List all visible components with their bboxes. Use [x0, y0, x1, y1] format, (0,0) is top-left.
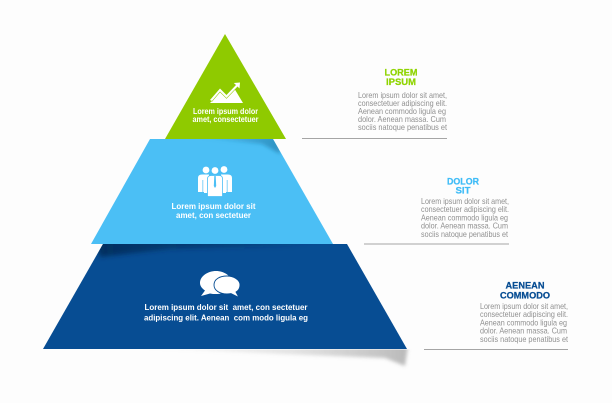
text block: lorem ipsum [358, 68, 448, 132]
text block: dolor sit [421, 176, 509, 239]
body text: lorem ipsum: Aenean commodo ligula eg [358, 106, 446, 116]
drop shadow under pyramid base [208, 350, 410, 367]
heading: aenean commodo [500, 280, 551, 302]
heading: dolor sit: SIT [456, 186, 471, 196]
text block: aenean commodo [480, 280, 569, 344]
body text: dolor sit: Lorem ipsum dolor sit amet, [421, 196, 509, 206]
pyramid tier: top green [165, 34, 286, 139]
icon: speech bubbles [200, 271, 240, 298]
body text: lorem ipsum: dolor. Aenean massa. Cum [358, 114, 446, 124]
body text: aenean commodo: consectetuer adipiscing elit. [480, 309, 568, 319]
light blue tier label [172, 202, 256, 220]
heading: lorem ipsum: LOREM [384, 68, 418, 78]
body text: dolor sit: sociis natoque penatibus et [421, 229, 509, 239]
green tier label: amet, consectetuer [192, 115, 259, 124]
icon: mountain chart [210, 82, 243, 103]
body text: dolor sit: Aenean commodo ligula eg [421, 212, 508, 222]
body text: dolor sit: dolor. Aenean massa. Cum [421, 221, 508, 231]
green tier label: Lorem ipsum dolor [193, 107, 259, 116]
body text: dolor sit: consectetuer adipiscing elit. [421, 204, 509, 214]
pyramid tier: middle light blue [91, 137, 333, 244]
light blue tier label: Lorem ipsum dolor sit [172, 202, 256, 211]
navy tier label [144, 303, 308, 322]
heading: lorem ipsum: IPSUM [386, 77, 416, 88]
heading: aenean commodo: AENEAN [506, 280, 545, 292]
body text: aenean commodo: Lorem ipsum dolor sit amet, [480, 301, 568, 311]
body text: aenean commodo: sociis natoque penatibus et [480, 334, 569, 344]
body text: lorem ipsum [358, 90, 448, 132]
body text: aenean commodo: dolor. Aenean massa. Cum [480, 326, 567, 336]
pyramid tier: bottom navy [43, 240, 407, 349]
body text: dolor sit [421, 196, 509, 239]
heading: lorem ipsum [384, 68, 418, 88]
heading: aenean commodo: COMMODO [500, 290, 551, 302]
body text: lorem ipsum: Lorem ipsum dolor sit amet, [358, 90, 447, 100]
body text: lorem ipsum: consectetuer adipiscing elit. [358, 98, 447, 108]
light blue tier label: amet, con sectetuer [176, 211, 252, 220]
body text: aenean commodo: Aenean commodo ligula eg [480, 317, 567, 327]
heading: dolor sit: DOLOR [447, 176, 479, 188]
body text: aenean commodo [480, 301, 569, 344]
icon: business people group [198, 166, 232, 196]
heading: dolor sit [447, 176, 479, 196]
green tier label [192, 107, 259, 124]
navy tier label: adipiscing elit. Aenean com modo ligula eg [144, 314, 308, 322]
body text: lorem ipsum: sociis natoque penatibus et [358, 122, 448, 132]
navy tier label: Lorem ipsum dolor sit amet, con sectetuer [144, 303, 308, 312]
